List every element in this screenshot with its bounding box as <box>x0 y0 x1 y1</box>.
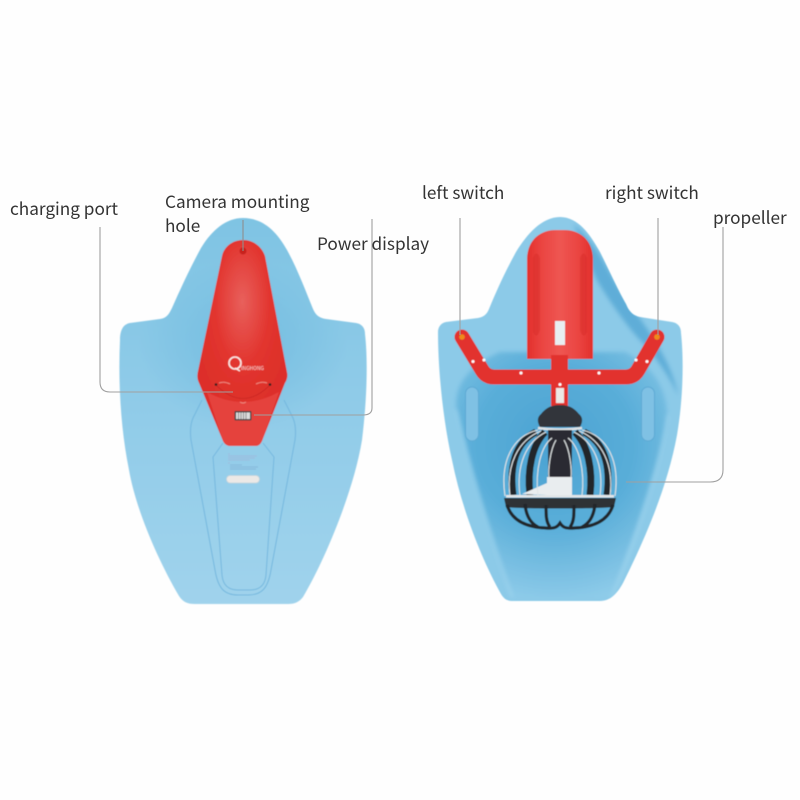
red t-bar and arms <box>462 337 657 406</box>
red handle paddle <box>527 230 593 359</box>
label: propeller: propeller <box>713 204 787 229</box>
leader: camera mounting hole <box>242 220 244 251</box>
leader lines <box>100 218 723 482</box>
cage white ribs <box>504 430 616 496</box>
leader: propeller <box>626 227 723 482</box>
label: charging port: charging port <box>10 195 119 220</box>
red top panel <box>197 240 287 446</box>
leader: power display <box>254 219 372 415</box>
label: camera mounting hole: Camera mounting <box>165 188 309 213</box>
charging port details <box>215 382 271 403</box>
power display <box>234 411 252 420</box>
right switch <box>654 334 660 340</box>
propeller <box>504 405 616 528</box>
label: right switch: right switch <box>605 179 699 204</box>
paddle ribs <box>533 254 540 336</box>
right grip <box>642 387 654 441</box>
motor cap <box>538 405 582 427</box>
lower panel highlight <box>207 392 279 446</box>
camera mounting hole <box>240 248 246 254</box>
logo <box>229 357 264 372</box>
left grip <box>466 387 478 441</box>
leader: left switch <box>459 218 461 335</box>
lower guard ribs <box>507 504 613 528</box>
label: camera mounting hole: hole <box>165 212 200 237</box>
label: power display: Power display <box>317 230 429 255</box>
shading around the red panel <box>174 302 312 395</box>
handle sticker <box>555 321 565 345</box>
propeller blades <box>522 477 572 495</box>
label text block <box>228 454 258 469</box>
label: left switch: left switch <box>422 179 504 204</box>
leader: right switch <box>657 218 659 335</box>
lower well <box>456 352 667 598</box>
light rim strip left <box>456 411 509 587</box>
paddle ribs right <box>580 254 587 336</box>
logo: INGHONG <box>241 365 264 372</box>
central motor shaft <box>548 430 572 477</box>
board: front view <box>438 217 683 601</box>
inner rim shadow <box>573 224 678 396</box>
lower ring <box>506 495 614 498</box>
leader: charging port <box>100 227 233 392</box>
board: back view <box>119 218 367 604</box>
white badge <box>226 476 260 483</box>
moulded inner outline <box>213 443 274 590</box>
light rim strip right <box>620 416 668 574</box>
motor ring <box>538 428 582 430</box>
rivets <box>472 358 648 386</box>
lower guard band <box>504 498 616 508</box>
moulded outline <box>190 400 296 595</box>
cage black ribs <box>512 432 608 495</box>
left switch <box>459 334 465 340</box>
